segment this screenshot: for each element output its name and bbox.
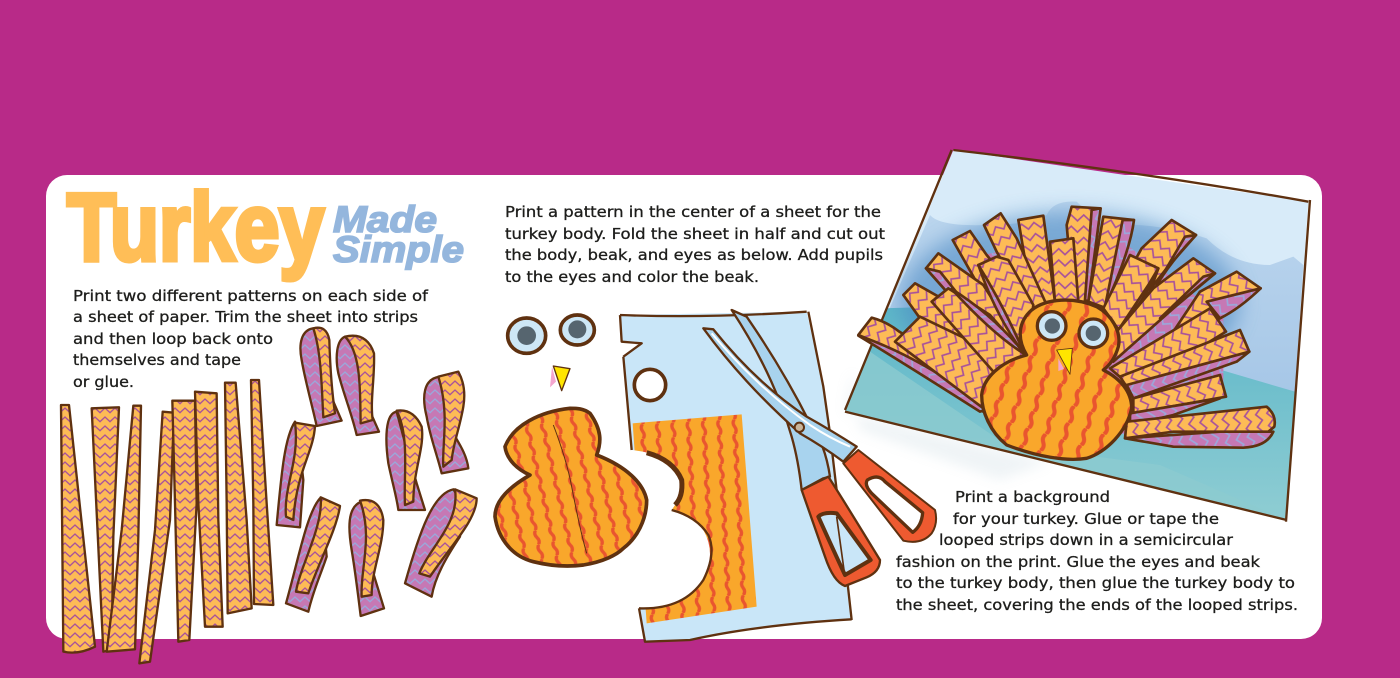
loop eight: [405, 489, 477, 597]
text block: step one: or glue.: [73, 373, 134, 391]
text block: step two: [505, 203, 885, 286]
loop three: [277, 422, 315, 527]
title: Turkey Made Simple: Made: [333, 199, 437, 240]
loop four: [386, 410, 425, 510]
text block: step three: the sheet, covering the ends of the looped strips.: [896, 596, 1298, 614]
text block: step one: a sheet of paper. Trim the sheet into strips: [73, 308, 418, 326]
feathers: [858, 207, 1275, 448]
text block: step two: Print a pattern in the center of a sheet for the: [505, 203, 881, 221]
text block: step three: fashion on the print. Glue the eyes and beak: [896, 553, 1260, 571]
text block: step three: for your turkey. Glue or tape the: [953, 510, 1219, 528]
text block: step one: Print two different patterns on each side of: [73, 287, 429, 305]
beak: [550, 366, 570, 391]
eye cut-out left: [508, 318, 546, 353]
loop one: [300, 328, 342, 426]
loop five: [424, 372, 468, 473]
text block: step three: to the turkey body, then glue the turkey body to: [896, 574, 1295, 592]
finished turkey picture: [845, 150, 1310, 522]
title: Turkey Made Simple: Simple: [333, 229, 464, 270]
paper strips and loops illustration: [61, 328, 477, 663]
text block: step one: [73, 287, 429, 391]
turkey body: [982, 300, 1132, 459]
scissors: [703, 310, 936, 586]
turkey beak: [1057, 348, 1072, 374]
straight strips: [61, 380, 273, 663]
loop six: [286, 497, 340, 612]
soft shadow under turkey picture: [862, 418, 1035, 478]
background print: [845, 150, 1310, 522]
text block: step three: Print a background: [955, 488, 1110, 506]
turkey eye right: [1079, 319, 1108, 348]
text block: step two: to the eyes and color the beak.: [505, 268, 759, 286]
text block: step three: [896, 488, 1298, 614]
loop two: [337, 336, 379, 435]
eye cut-out right: [560, 315, 594, 345]
folded paper sheet with cut-outs: [620, 312, 852, 642]
white panel: [46, 175, 1322, 639]
text block: step two: the body, beak, and eyes as below. Add pupils: [505, 246, 883, 264]
title: Turkey Made Simple: Turkey: [67, 174, 324, 281]
cut-out pieces and scissors illustration: [495, 310, 936, 642]
text block: step two: turkey body. Fold the sheet in half and cut out: [505, 225, 885, 243]
loop seven: [349, 500, 384, 616]
text block: step one: and then loop back onto: [73, 330, 273, 348]
turkey eye left: [1037, 312, 1066, 340]
text block: step one: themselves and tape: [73, 351, 241, 369]
turkey body cut-out: [495, 408, 647, 566]
text block: step three: looped strips down in a semicircular: [939, 531, 1234, 549]
